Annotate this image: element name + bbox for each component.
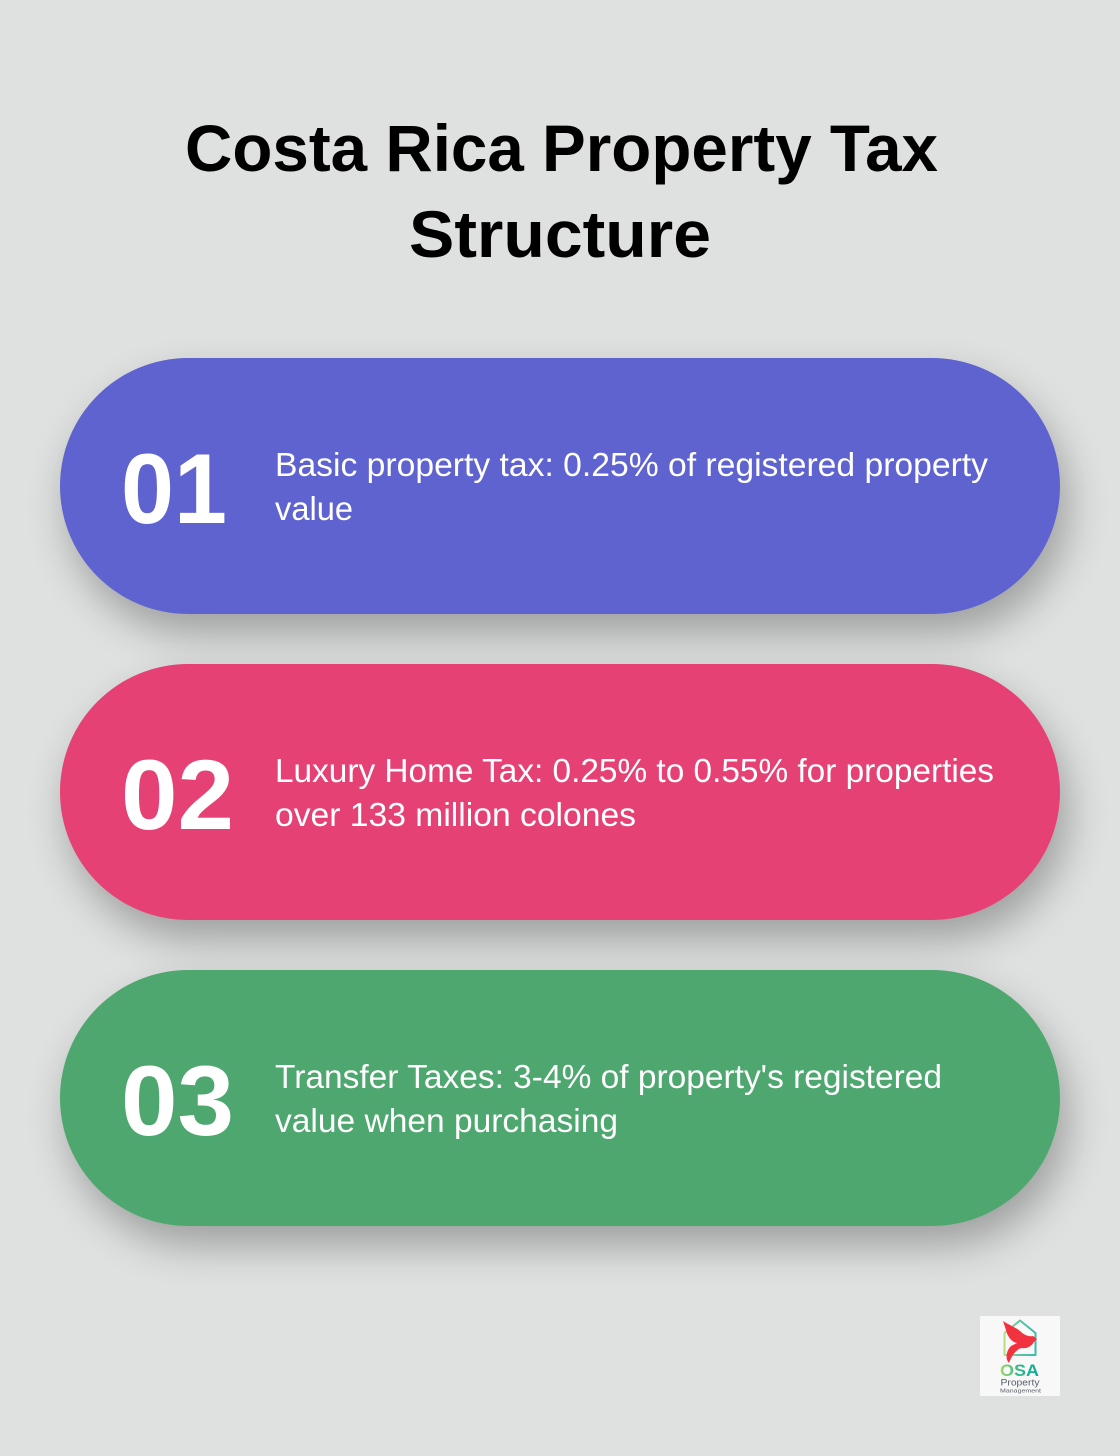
logo wordmark: Property (1000, 1378, 1040, 1388)
panel: luxury home tax (60, 664, 1060, 920)
text: luxury home tax: Luxury Home Tax: 0.25% to 0.55% for properties (275, 752, 994, 789)
number 01: 01 (121, 433, 227, 544)
title: Costa Rica Property Tax (185, 111, 938, 185)
number 02: 02 (121, 739, 234, 850)
text: luxury home tax (275, 752, 994, 833)
logo wordmark (1000, 1361, 1042, 1394)
icon: house outline (1004, 1320, 1036, 1355)
text: transfer taxes: Transfer Taxes: 3-4% of property's registered (275, 1058, 942, 1095)
logo wordmark: OSA (1000, 1361, 1039, 1380)
text: basic property tax (275, 446, 988, 527)
logo: OSA Property Management (980, 1316, 1060, 1396)
text: basic property tax: Basic property tax: 0.25% of registered property (275, 446, 988, 483)
title: Structure (409, 197, 711, 271)
panel: transfer taxes (60, 970, 1060, 1226)
title (185, 111, 938, 271)
logo wordmark: Management (1000, 1388, 1042, 1394)
text: transfer taxes (275, 1058, 942, 1139)
panel: basic property tax (60, 358, 1060, 614)
text: transfer taxes: value when purchasing (275, 1102, 618, 1139)
number 03: 03 (121, 1045, 234, 1156)
text: luxury home tax: over 133 million colones (275, 796, 636, 833)
text: basic property tax: value (275, 490, 353, 527)
icon: red bird (1003, 1321, 1037, 1363)
